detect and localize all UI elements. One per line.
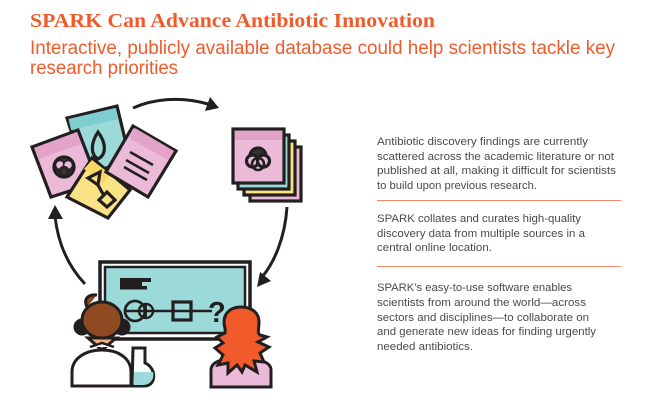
text block: SPARK software: needed antibiotics. xyxy=(377,341,473,353)
text block: SPARK software: and generate new ideas for finding urgently xyxy=(377,326,596,338)
icon: stacked notes xyxy=(233,129,301,201)
arrow: stack to screen xyxy=(257,207,287,287)
arrow: notes to stack xyxy=(133,97,219,111)
text block: current problem: published at all, making it difficult for scientists xyxy=(377,165,616,177)
text block: SPARK software: SPARK’s easy-to-use software enables xyxy=(377,282,572,294)
icon: researcher with red hair xyxy=(211,307,271,387)
teal note xyxy=(67,106,130,175)
left pink note xyxy=(32,130,98,197)
title: SPARK Can Advance Antibiotic Innovation xyxy=(30,10,436,32)
subtitle xyxy=(30,38,615,79)
text block: SPARK collates: discovery data from multiple sources in a xyxy=(377,228,586,240)
right pink note xyxy=(106,126,176,197)
subtitle: Interactive, publicly available database could help scientists tackle key xyxy=(30,38,615,59)
text block: SPARK collates: SPARK collates and curates high-quality xyxy=(377,213,581,225)
text block: SPARK collates xyxy=(377,213,586,254)
icon: scientist xyxy=(72,295,131,386)
text block: SPARK software: scientists from around the world—across xyxy=(377,297,586,309)
text block: SPARK software xyxy=(377,282,596,353)
divider xyxy=(377,200,621,201)
subtitle: research priorities xyxy=(30,58,178,79)
text block: current problem: to build upon previous research. xyxy=(377,180,537,192)
yellow note xyxy=(67,158,130,218)
text block: current problem xyxy=(377,136,616,192)
icon: scattered notes xyxy=(32,106,176,218)
screen diagram xyxy=(120,278,212,321)
arrow: screen to notes xyxy=(48,205,85,284)
icon: monitor: ? xyxy=(208,297,226,329)
text block: SPARK software: sectors and disciplines—to collaborate on xyxy=(377,312,589,324)
icon: flask xyxy=(132,348,154,386)
text block: current problem: Antibiotic discovery findings are currently xyxy=(377,136,588,148)
divider xyxy=(377,266,621,267)
text block: current problem: scattered across the academic literature or not xyxy=(377,151,615,163)
text block: SPARK collates: central online location. xyxy=(377,242,492,254)
icon: monitor xyxy=(100,262,250,339)
